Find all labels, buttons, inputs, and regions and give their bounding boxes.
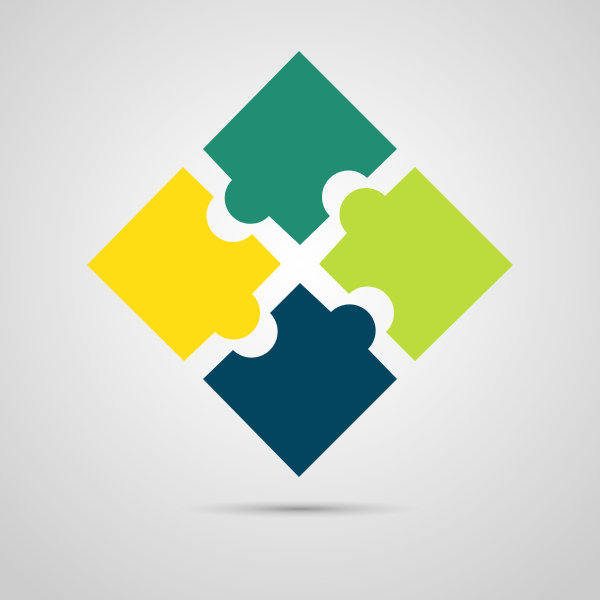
puzzle piece: green top (203, 51, 397, 245)
puzzle piece: lime right (319, 167, 513, 361)
ground shadow (178, 500, 422, 518)
puzzle piece: yellow left (87, 167, 281, 361)
puzzle piece: navy bottom (203, 283, 397, 477)
